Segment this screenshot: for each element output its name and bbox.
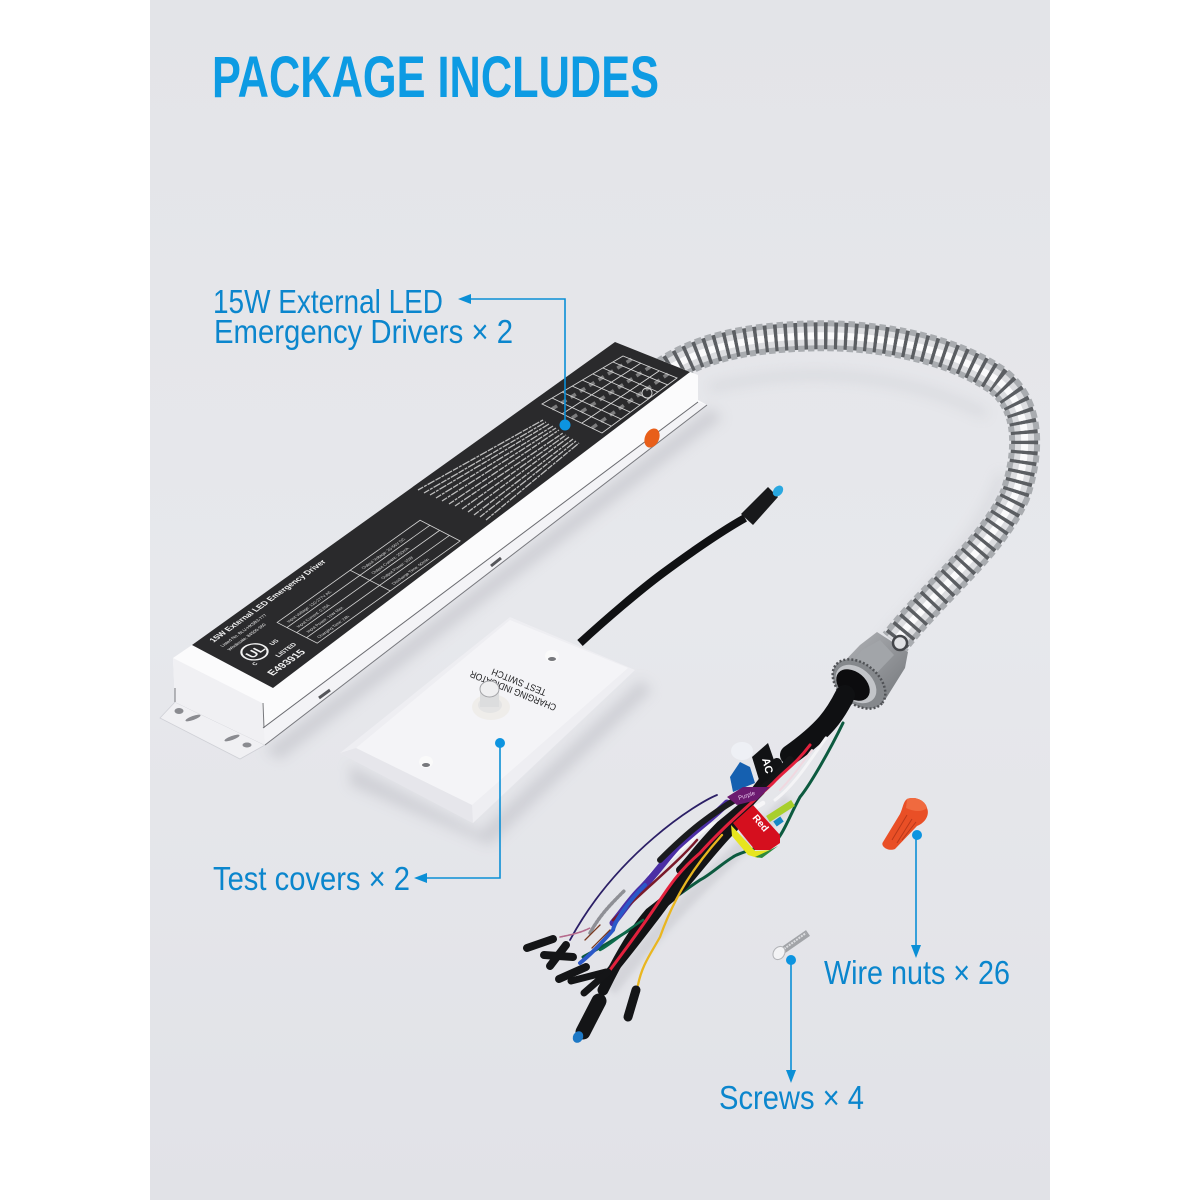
callout: test covers: Test covers × 2: [213, 860, 410, 897]
wall plate test cover: [340, 617, 635, 823]
callout: test covers: [213, 738, 505, 897]
label title and logo text: Wholesale: 84500-360: [226, 623, 268, 651]
label title and logo text: US: [269, 639, 281, 646]
mounting holes: [419, 650, 559, 768]
test switch cable: [580, 484, 785, 643]
test switch button: [472, 681, 510, 720]
wire shadow: [610, 800, 790, 990]
spec table: Input Current: 0.25A: [295, 603, 331, 628]
wiring harness: [560, 695, 845, 990]
LED emergency driver box: [173, 342, 707, 745]
wiring table: [542, 356, 677, 433]
label title and logo text: [204, 558, 391, 677]
wire tags: [727, 742, 793, 858]
callout: screws: Screws × 4: [719, 1079, 864, 1116]
large tip blue end: [571, 1029, 585, 1045]
callout: LED drivers: Emergency Drivers × 2: [214, 313, 513, 350]
red yellow tag: Red: [750, 813, 770, 834]
driver mounting flange: [160, 702, 265, 759]
callout: LED drivers: [213, 283, 570, 430]
warning fine print: [418, 420, 579, 520]
spec table: Input Voltage: 120-277V AC: [285, 590, 333, 623]
callout: LED drivers: 15W External LED: [213, 283, 443, 320]
purple tag: Purple: [738, 791, 757, 802]
orange indicator sticker: [641, 426, 663, 450]
label title and logo text: C: [251, 662, 260, 667]
plate printed text: TEST SWITCH: [490, 665, 548, 697]
plate printed text: CHARGING INDICATOR: [469, 668, 558, 712]
callout: screws: [719, 955, 864, 1116]
title: PACKAGE INCLUDES: [212, 45, 659, 110]
spec table: Charging Time: 24h: [316, 614, 351, 639]
shadows under products: [265, 375, 1002, 845]
label title and logo text: UL: [242, 643, 269, 660]
label title and logo text: 15W External LED Emergency Driver: [207, 558, 329, 643]
label title and logo text: E493915: [266, 648, 309, 677]
callout: wire nuts: [824, 830, 1010, 991]
label title and logo text: Listed No. BLU-HK5B3-777: [219, 613, 269, 648]
screw: [770, 933, 808, 962]
conduit connector: [823, 632, 908, 719]
blue tag: [730, 762, 755, 792]
spec table: Output Voltage: 20-56V DC: [360, 537, 407, 570]
wire tip sleeves: [527, 939, 636, 1032]
callout: wire nuts: Wire nuts × 26: [824, 954, 1010, 991]
spec table: [277, 520, 460, 643]
spec table: Input Power: 11W Max: [305, 605, 345, 633]
case notches: [319, 558, 501, 698]
green-yellow sleeve: [768, 803, 793, 819]
label title and logo text: LISTED: [274, 642, 299, 658]
flange slots: [174, 708, 252, 748]
flexible metal conduit: [664, 336, 1025, 642]
background panel: [150, 0, 1050, 1200]
spec table: Output Power: 15W: [380, 555, 415, 580]
black AC tag: AC: [759, 757, 775, 775]
spec table: Output Current: 250mA: [370, 547, 410, 575]
spec table: Discharge Time: 90min: [390, 557, 431, 585]
black label: [192, 342, 690, 688]
wire nut: [882, 798, 928, 850]
white tag: [731, 742, 753, 760]
